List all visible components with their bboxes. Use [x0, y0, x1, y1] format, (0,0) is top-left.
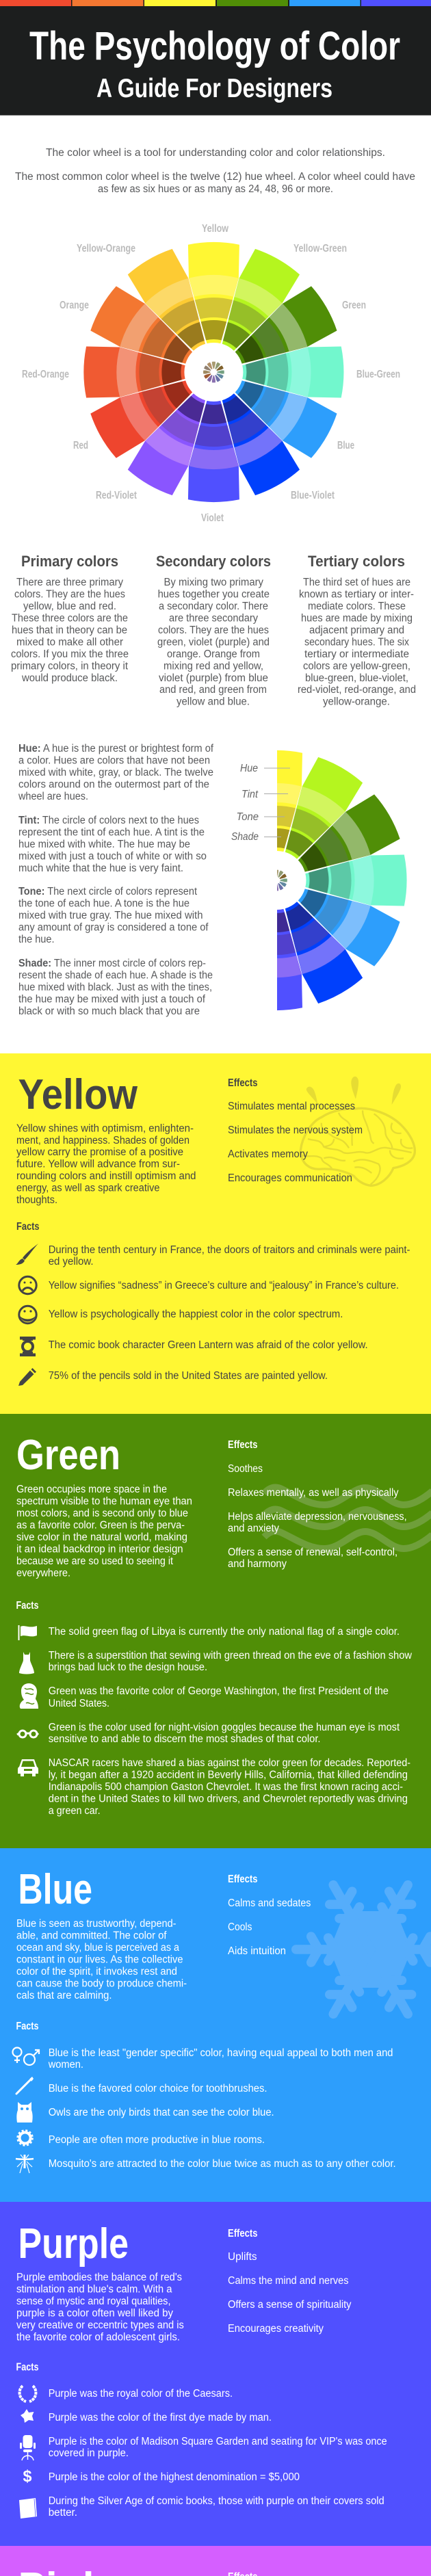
- fact: doors: ed yellow.: [49, 1256, 94, 1267]
- description: energy, as well as spark creative: [16, 1183, 159, 1194]
- color wheel labels: Blue-Green: [356, 369, 400, 380]
- fact: dress: There is a superstition that sewing with green thread on the eve of a fashion show: [49, 1650, 413, 1661]
- heading: Green: Green: [16, 1432, 120, 1479]
- panel: primary colors: colors. They are the hues: [14, 588, 125, 601]
- description: sense of mystic and royal qualities,: [16, 2296, 171, 2307]
- panel: secondary colors: violet (purple) from blue: [159, 672, 268, 684]
- fact: comics: better.: [49, 2507, 77, 2519]
- panel: purple: [0, 2202, 431, 2546]
- description: [16, 1484, 192, 1579]
- color wheel labels: Green: [342, 300, 366, 311]
- intro text: as few as six hues or as many as 24, 48, 96 or more.: [98, 183, 333, 195]
- effects list: Offers a sense of spirituality: [228, 2299, 352, 2311]
- effects list: [228, 1874, 311, 1957]
- icon: george washington: [20, 1683, 38, 1709]
- description: sive color in the natural world, making: [16, 1532, 187, 1543]
- icon: gear: [18, 2130, 33, 2145]
- fact: doors: During the tenth century in France, the doors of traitors and criminals were paint-: [49, 1244, 410, 1256]
- fact: dress: [49, 1650, 413, 1673]
- panel: primary colors: [11, 553, 129, 684]
- fact: gender: [48, 2047, 393, 2071]
- panel: primary colors: would produce black.: [21, 672, 118, 684]
- intro text: The most common color wheel is the twelve (12) hue wheel. A color wheel could have: [15, 171, 415, 183]
- panel: tertiary colors: known as tertiary or inter-: [299, 588, 414, 601]
- fact: mosquito: Mosquito's are attracted to the color blue twice as much as to any other color.: [49, 2158, 396, 2170]
- fact: gender: women.: [48, 2059, 83, 2071]
- effects list: Effects: [228, 2228, 257, 2239]
- effects list: Stimulates the nervous system: [228, 1125, 363, 1136]
- description: rounding colors and instill optimism and: [16, 1170, 196, 1182]
- description: [16, 1918, 187, 2001]
- panel: primary colors: There are three primary: [16, 577, 123, 588]
- half wheel callouts: [231, 763, 290, 843]
- panel: tertiary colors: The third set of hues are: [303, 577, 410, 588]
- effects list: Effects: [228, 1874, 257, 1885]
- panel: secondary colors: orange. Orange from: [167, 648, 260, 660]
- effects list: and anxiety: [228, 1523, 279, 1534]
- fact: doors: [49, 1244, 410, 1267]
- description: Blue is seen as trustworthy, depend-: [16, 1918, 177, 1930]
- fact: caesars: Purple was the royal color of the Caesars.: [49, 2388, 233, 2400]
- color wheel: [83, 242, 343, 502]
- icon: sad face: [19, 1276, 36, 1294]
- panel: tertiary colors: Tertiary colors: [308, 553, 405, 570]
- description: spectrum visible to the human eye than: [16, 1495, 192, 1508]
- panel: secondary colors: a secondary color. There: [159, 601, 268, 612]
- description: cals that are calming.: [16, 1990, 112, 2001]
- facts heading: Facts: [16, 2021, 38, 2032]
- fact: goggles: sensitive to and able to discern the most shades of that color.: [49, 1733, 320, 1745]
- panel: tertiary colors: [298, 553, 416, 708]
- icon: laurel: [20, 2386, 36, 2402]
- color wheel labels: Red-Orange: [22, 369, 69, 380]
- description: Green occupies more space in the: [16, 1484, 167, 1495]
- fact: lantern: The comic book character Green Lantern was afraid of the color yellow.: [49, 1339, 368, 1351]
- fact: nascar: dent in the United States to kill two drivers, and Chevrolet reportedly was driving: [49, 1793, 408, 1804]
- panel: tertiary colors: hues are made by mixing: [301, 612, 413, 624]
- fact: madison square garden: Purple is the color of Madison Square Garden and seating for VIP's was once: [49, 2436, 387, 2447]
- color wheel labels: Blue-Violet: [291, 490, 335, 501]
- text block: hue tint tone shade definitions: the hue.: [18, 934, 55, 945]
- effects list: Soothes: [228, 1463, 263, 1475]
- color wheel labels: Yellow-Orange: [77, 243, 135, 254]
- description: Yellow shines with optimism, enlighten-: [16, 1122, 194, 1134]
- fact: comics: During the Silver Age of comic books, those with purple on their covers sold: [49, 2495, 384, 2507]
- panel: tertiary colors: red-violet, red-orange, and: [298, 684, 416, 696]
- color wheel labels: [22, 223, 400, 524]
- panel: tertiary colors: blue-green, blue-violet,: [305, 672, 408, 684]
- fact: madison square garden: [49, 2436, 387, 2459]
- text block: hue tint tone shade definitions: a color. Hues are colors that have not been: [18, 755, 210, 766]
- description: very creative or eccentric types and is: [16, 2319, 184, 2331]
- panel: blue: [0, 1848, 431, 2202]
- description: can cause the body to produce chemi-: [16, 1977, 187, 1989]
- fact: denomination: Purple is the color of the highest denomination = $5,000: [49, 2471, 300, 2483]
- effects list: Offers a sense of renewal, self-control,: [228, 1547, 397, 1558]
- description: ment, and happiness. Shades of golden: [16, 1135, 190, 1146]
- icon: paint brush: [16, 1244, 38, 1265]
- icon: pencil: [18, 1368, 36, 1386]
- description: [16, 2272, 184, 2343]
- text block: hue tint tone shade definitions: mixed with white, gray, or black. The twelve: [18, 767, 213, 778]
- description: everywhere.: [16, 1567, 70, 1579]
- effects list: Activates memory: [228, 1148, 308, 1160]
- heading: Blue: Blue: [18, 1866, 92, 1913]
- description: because we are so used to seeing it: [16, 1555, 174, 1567]
- fact: goggles: Green is the color used for night-vision goggles because the human eye is most: [49, 1722, 400, 1733]
- half wheel callouts: Shade: [231, 831, 259, 843]
- fact: flag: The solid green flag of Libya is currently the only national flag of a single color.: [49, 1626, 400, 1638]
- fact: pencils: 75% of the pencils sold in the United States are painted yellow.: [49, 1370, 328, 1382]
- text block: hue tint tone shade definitions: mixed with just a touch of white or with so: [18, 850, 207, 862]
- color wheel labels: Yellow: [202, 223, 229, 235]
- fact: owls: Owls are the only birds that can see the color blue.: [49, 2107, 274, 2118]
- panel: secondary colors: Secondary colors: [156, 553, 271, 570]
- effects list: and harmony: [228, 1558, 287, 1570]
- description: thoughts.: [16, 1194, 57, 1206]
- color wheel labels: Orange: [60, 300, 89, 311]
- panel: primary colors: hues that in theory can be: [12, 625, 127, 636]
- half wheel callouts: Tint: [241, 789, 259, 800]
- fact: washington: [49, 1685, 389, 1709]
- text block: hue tint tone shade definitions: any amount of gray is considered a tone of: [18, 921, 209, 933]
- icon: mosquito: [16, 2155, 34, 2173]
- effects list: Calms the mind and nerves: [228, 2275, 349, 2287]
- text block: hue tint tone shade definitions: hue mixed with black. Just as with the tines,: [18, 982, 212, 993]
- panel: secondary colors: green, violet (purple) and: [157, 636, 270, 648]
- panel: green: [0, 1414, 431, 1848]
- icon: star: [21, 2409, 34, 2423]
- description: [16, 1122, 196, 1206]
- text block: hue tint tone shade definitions: resent the shade of each hue. A shade is the: [18, 970, 213, 981]
- panel: primary colors: These three colors are the: [12, 612, 128, 624]
- fact: nascar: Indianapolis 500 champion Gaston Chevrolet. It was the first known racing acci-: [49, 1781, 403, 1793]
- icon: goggles: [17, 1731, 38, 1737]
- panel: tertiary colors: secondary hues. The six: [304, 636, 409, 648]
- panel: primary colors: mixed to make all other: [16, 636, 123, 648]
- fact: rooms: People are often more productive in blue rooms.: [49, 2134, 265, 2146]
- text block: hue tint tone shade definitions: Shade: The inner most circle of colors rep-: [18, 958, 206, 969]
- panel: secondary colors: mixing red and yellow,: [164, 660, 263, 672]
- text block: hue tint tone shade definitions: [18, 743, 214, 1017]
- effects list: Uplifts: [228, 2251, 257, 2263]
- effects list: Effects: [228, 1077, 257, 1089]
- fact: dye: Purple was the color of the first dye made by man.: [49, 2412, 272, 2423]
- icon: comic book: [19, 2498, 37, 2519]
- subtitle: A Guide For Designers: [96, 74, 332, 103]
- description: future. Yellow will advance from sur-: [16, 1159, 180, 1170]
- effects list: [228, 1439, 407, 1570]
- panel: tertiary colors: mediate colors. These: [308, 601, 406, 612]
- fact: nascar: ly, it began after a 1920 accident in Beverly Hills, California, that killed defending: [49, 1769, 408, 1781]
- color wheel labels: Red-Violet: [96, 490, 137, 501]
- icon: car: [18, 1759, 38, 1776]
- panel: secondary colors: yellow and blue.: [177, 696, 250, 708]
- effects list: [228, 1077, 363, 1184]
- text block: hue tint tone shade definitions: represent the tint of each hue. A tint is the: [18, 826, 205, 839]
- fact: dress: brings bad luck to the design house.: [49, 1661, 207, 1673]
- panel: primary colors: yellow, blue and red.: [23, 601, 116, 612]
- heading: Purple: Purple: [18, 2220, 129, 2268]
- panel: tertiary colors: adjacent primary and: [309, 625, 404, 636]
- panel: primary colors: Primary colors: [21, 553, 118, 570]
- description: constant in our lives. As the collective: [16, 1954, 183, 1965]
- icon: flag: [18, 1625, 37, 1640]
- half wheel callouts: Hue: [240, 763, 258, 774]
- description: Purple embodies the balance of red's: [16, 2272, 182, 2283]
- illustration: brain: [300, 1077, 415, 1185]
- description: purple is a color often well liked by: [16, 2307, 173, 2319]
- panel: secondary colors: are three secondary: [169, 612, 258, 624]
- fact: happiest: Yellow is psychologically the happiest color in the color spectrum.: [49, 1309, 343, 1320]
- panel: primary colors: primary colors, in theory it: [11, 660, 129, 672]
- illustration: waves: [264, 1487, 431, 1549]
- fact: washington: United States.: [49, 1698, 109, 1709]
- effects list: Cools: [228, 1921, 252, 1933]
- icon: dress: [19, 1652, 34, 1674]
- effects list: Helps alleviate depression, nervousness,: [228, 1511, 407, 1523]
- panel: primary colors: colors. If you mix the three: [11, 648, 129, 660]
- fact: nascar: NASCAR racers have shared a bias against the color green for decades. Reported-: [49, 1757, 410, 1769]
- description: most colors, and is second only to blue: [16, 1508, 188, 1519]
- color wheel labels: Red: [73, 440, 88, 451]
- description: it an ideal backdrop in interior design: [16, 1543, 183, 1555]
- fact: goggles: [49, 1722, 400, 1745]
- icon: toothbrush: [16, 2077, 34, 2094]
- icon: dollar: $: [23, 2467, 32, 2486]
- panel: tertiary colors: colors are yellow-green,: [303, 660, 410, 672]
- illustration: snowflake: [296, 1878, 431, 2021]
- half color wheel: [277, 750, 407, 1011]
- effects list: Stimulates mental processes: [228, 1101, 355, 1112]
- icon: gender symbols: [12, 2048, 39, 2065]
- effects list: Effects: [228, 1439, 257, 1451]
- facts heading: Facts: [16, 1600, 38, 1612]
- panel: secondary colors: hues together you create: [158, 588, 270, 601]
- text block: hue tint tone shade definitions: colors around on the outermost part of the: [18, 778, 209, 790]
- text block: hue tint tone shade definitions: the hue may be mixed with just a touch of: [18, 993, 206, 1005]
- panel: tertiary colors: tertiary or intermediate: [304, 648, 409, 660]
- description: yellow carry the promise of a positive: [16, 1146, 183, 1158]
- fact: gender: Blue is the least "gender specific" color, having equal appeal to both men and: [49, 2047, 393, 2059]
- text block: hue tint tone shade definitions: wheel are hues.: [18, 791, 88, 802]
- icon: owl: [16, 2102, 33, 2122]
- heading: Yellow: Yellow: [18, 1071, 138, 1118]
- intro text: [15, 147, 415, 195]
- panel: secondary colors: colors. They are the hues: [158, 625, 269, 636]
- panel: secondary colors: [156, 553, 271, 708]
- intro text: The color wheel is a tool for understanding color and color relationships.: [46, 147, 385, 159]
- panel: secondary colors: and red, and green from: [159, 684, 267, 696]
- effects list: Encourages communication: [228, 1172, 352, 1184]
- fact: nascar: a green car.: [49, 1805, 101, 1817]
- text block: hue tint tone shade definitions: much white that the hue is very faint.: [18, 863, 183, 874]
- text block: hue tint tone shade definitions: Hue: A hue is the purest or brightest form of: [18, 743, 214, 754]
- facts heading: Facts: [16, 1221, 40, 1233]
- fact: sadness: Yellow signifies “sadness” in Greece’s culture and “jealousy” in France’s culture.: [49, 1280, 399, 1291]
- description: ocean and sky, blue is perceived as a: [16, 1942, 179, 1954]
- fact: nascar: [49, 1757, 410, 1817]
- description: color of the spirit, it invokes rest and: [16, 1966, 177, 1977]
- effects list: Encourages creativity: [228, 2323, 324, 2335]
- fact: comics: [49, 2495, 384, 2519]
- icon: happy face: [19, 1306, 36, 1324]
- icon: green lantern: [20, 1337, 36, 1356]
- facts heading: Facts: [16, 2361, 38, 2374]
- panel: tertiary colors: yellow-orange.: [323, 696, 390, 708]
- color wheel labels: Yellow-Green: [293, 243, 347, 254]
- panel: pink: [0, 2546, 431, 2576]
- description: the favorite color of adolescent girls.: [16, 2331, 180, 2343]
- panel: secondary colors: By mixing two primary: [164, 577, 263, 588]
- text block: hue tint tone shade definitions: Tone: The next circle of colors represent: [18, 886, 198, 897]
- description: as a favorite color. Green is the perva-: [16, 1519, 185, 1531]
- fact: madison square garden: covered in purple.: [49, 2447, 129, 2459]
- description: stimulation and blue's calm. With a: [16, 2283, 172, 2296]
- color stripes: [0, 0, 431, 6]
- effects list: Calms and sedates: [228, 1897, 311, 1909]
- text block: hue tint tone shade definitions: black or with so much black that you are: [18, 1006, 200, 1017]
- text block: hue tint tone shade definitions: mixed with true gray. The hue mixed with: [18, 910, 203, 921]
- color wheel labels: Blue: [337, 440, 354, 451]
- panel: yellow: [0, 1053, 431, 1414]
- fact: toothbrush: Blue is the favored color choice for toothbrushes.: [49, 2083, 267, 2094]
- color wheel labels: Violet: [201, 512, 224, 524]
- half wheel callouts: Tone: [237, 811, 259, 823]
- text block: hue tint tone shade definitions: Tint: The circle of colors next to the hues: [18, 815, 199, 826]
- text block: hue tint tone shade definitions: hue mixed with white. The hue may be: [18, 839, 190, 850]
- description: able, and committed. The color of: [16, 1930, 167, 1941]
- fact: washington: Green was the favorite color of George Washington, the first President of the: [49, 1685, 389, 1697]
- header banner: [0, 0, 431, 116]
- effects list: [228, 2228, 352, 2335]
- effects list: Aids intuition: [228, 1945, 286, 1957]
- icon: chair: [20, 2435, 36, 2460]
- effects list: Relaxes mentally, as well as physically: [228, 1487, 399, 1499]
- text block: hue tint tone shade definitions: the tone of each hue. A tone is the hue: [18, 897, 190, 910]
